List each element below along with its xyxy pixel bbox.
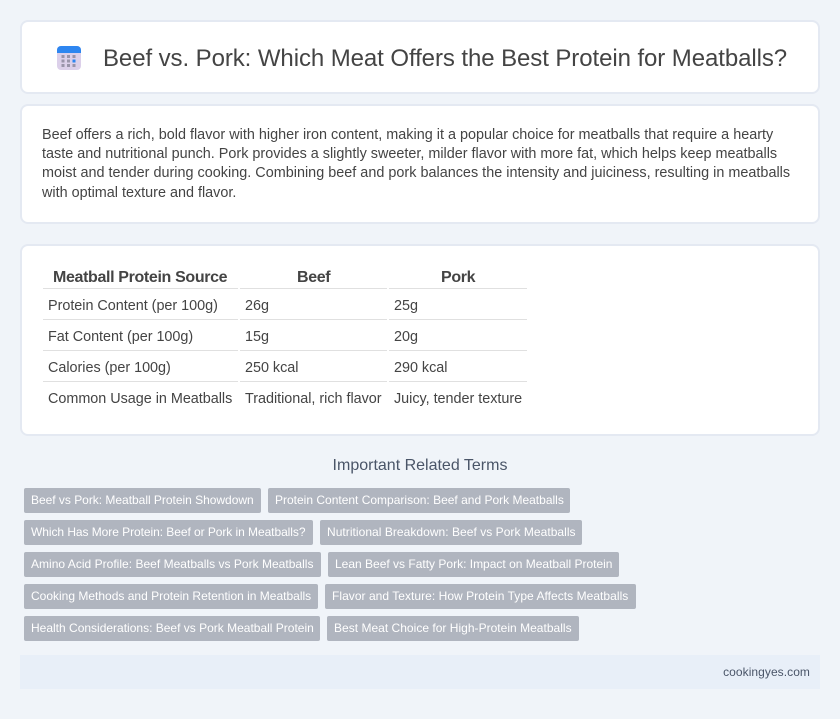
heading: related terms: Important Related Terms: [333, 457, 507, 474]
tag list: related terms: Beef vs Pork: Meatball Protein Showdown: [31, 493, 254, 507]
comparison table: 25g: [394, 298, 418, 314]
comparison table: 250 kcal: [245, 360, 298, 376]
text block: summary: [42, 127, 790, 201]
tag list: related terms: Protein Content Comparison: Beef and Pork Meatballs: [275, 493, 564, 507]
comparison table: 26g: [245, 298, 269, 314]
comparison table: Meatball Protein Source: [53, 269, 227, 286]
comparison table: Protein Content (per 100g): [48, 298, 218, 314]
footer source text: cookingyes.com: [723, 665, 810, 679]
comparison table: Traditional, rich flavor: [245, 391, 382, 407]
comparison table: Fat Content (per 100g): [48, 329, 193, 345]
panel: title card: [20, 20, 820, 94]
comparison table: 290 kcal: [394, 360, 447, 376]
tag list: related terms: Cooking Methods and Protein Retention in Meatballs: [31, 589, 311, 603]
tag list: related terms: Lean Beef vs Fatty Pork: Impact on Meatball Protein: [335, 557, 612, 571]
comparison table: 15g: [245, 329, 269, 345]
tag list: related terms: Health Considerations: Beef vs Pork Meatball Protein: [31, 621, 314, 635]
text block: summary: moist and tender during cooking. Combining beef and pork balances the intensity and juiciness, resulting in meatballs: [42, 165, 790, 181]
footer bar: [20, 655, 820, 689]
comparison table: Common Usage in Meatballs: [48, 391, 232, 407]
title: Beef vs. Pork: Which Meat Offers the Best Protein for Meatballs?: [103, 45, 787, 72]
comparison table: Calories (per 100g): [48, 360, 171, 376]
panel: comparison table card: [20, 244, 820, 436]
icon: calendar: [57, 46, 81, 70]
tag list: related terms: Flavor and Texture: How Protein Type Affects Meatballs: [332, 589, 628, 603]
text block: summary: with optimal texture and flavor.: [42, 185, 236, 201]
text block: summary: Beef offers a rich, bold flavor with higher iron content, making it a popular choice for meatballs that require a hearty: [42, 127, 773, 143]
comparison table: Beef: [297, 269, 330, 286]
tag list: related terms: Best Meat Choice for High-Protein Meatballs: [334, 621, 572, 635]
comparison table: 20g: [394, 329, 418, 345]
comparison table: [43, 269, 527, 407]
tag list: related terms: Which Has More Protein: Beef or Pork in Meatballs?: [31, 525, 305, 539]
comparison table: Pork: [441, 269, 475, 286]
panel: summary card: [20, 104, 820, 224]
tag list: related terms: Nutritional Breakdown: Beef vs Pork Meatballs: [327, 525, 576, 539]
tag list: related terms: [24, 488, 636, 641]
comparison table: Juicy, tender texture: [394, 391, 522, 407]
tag list: related terms: Amino Acid Profile: Beef Meatballs vs Pork Meatballs: [31, 557, 314, 571]
text block: summary: taste and nutritional punch. Pork provides a slightly sweeter, milder flavor with more fat, which helps keep meatballs: [42, 146, 777, 162]
